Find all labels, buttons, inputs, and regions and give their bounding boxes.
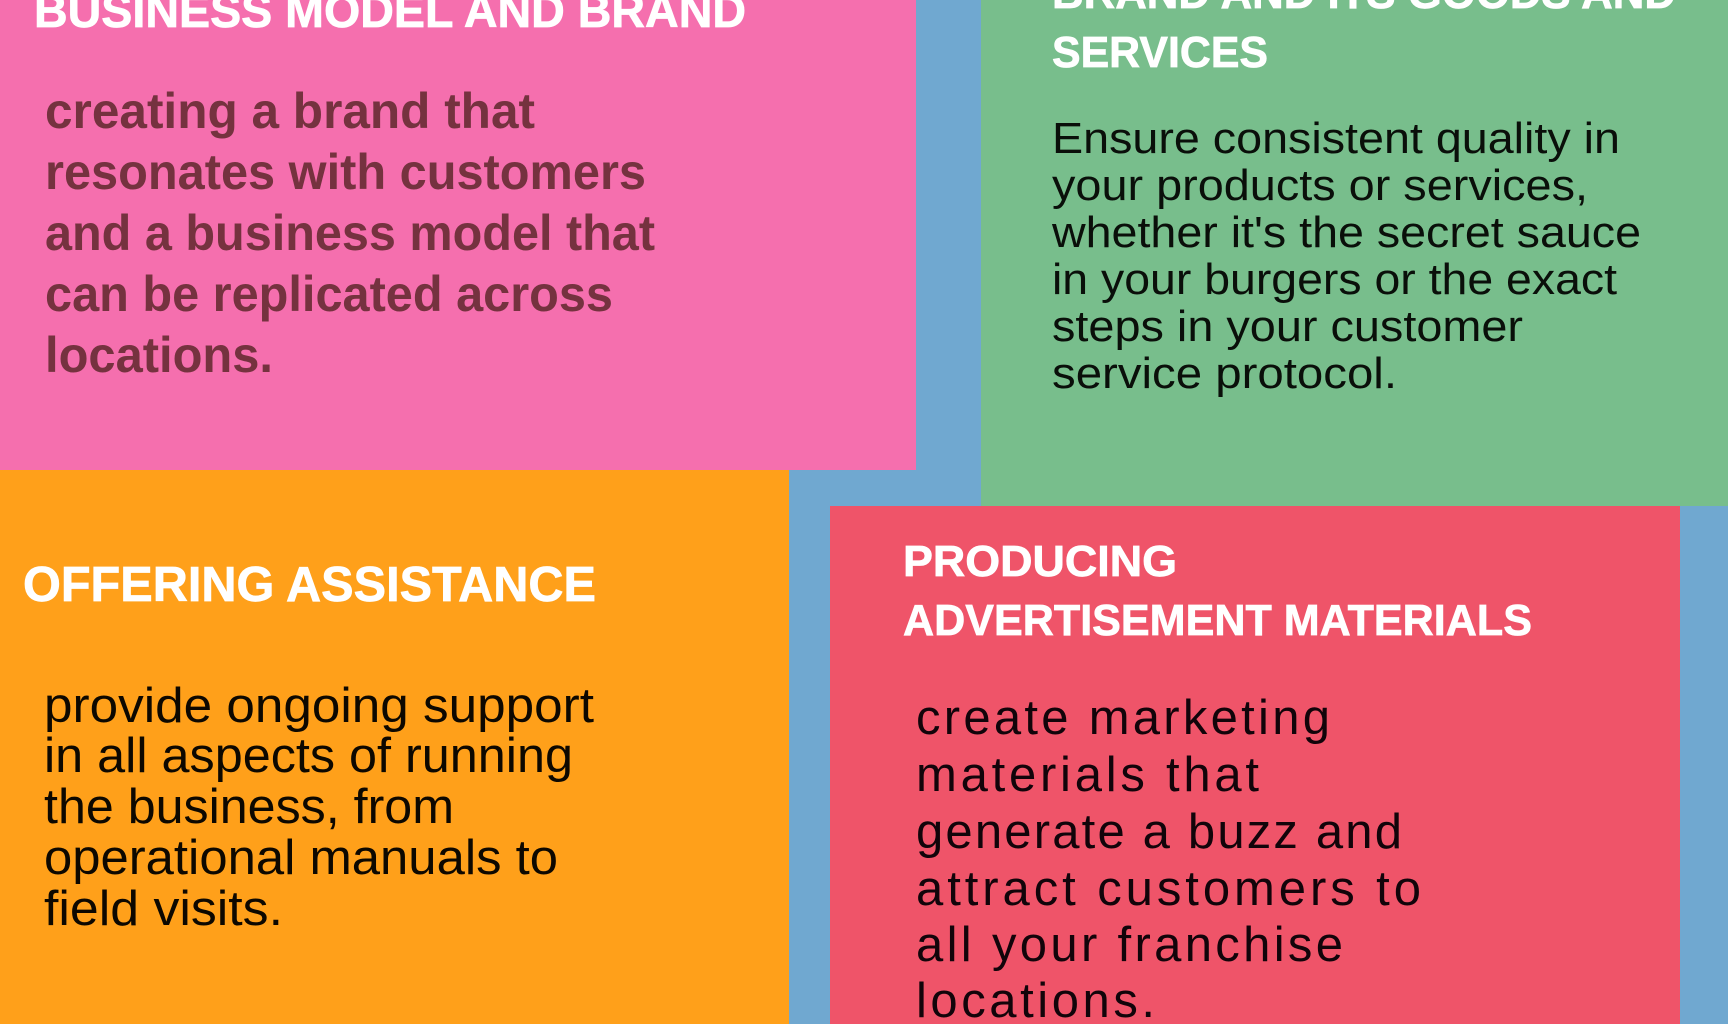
text block: consistent quality xyxy=(1051,114,1641,398)
text block: marketing materials: generate a buzz and xyxy=(916,805,1402,859)
panel: offering assistance xyxy=(0,470,789,1024)
heading: brand and its goods and services: SERVICES xyxy=(1052,28,1268,77)
text block: ongoing support: field visits. xyxy=(44,882,283,936)
text block: creating a brand: locations. xyxy=(45,327,273,383)
text block: consistent quality: steps in your customer xyxy=(1052,302,1523,351)
text block: marketing materials: materials that xyxy=(916,748,1259,802)
text block: consistent quality: service protocol. xyxy=(1052,349,1397,398)
panel: brand and its goods and services xyxy=(981,0,1728,506)
text block: ongoing support: the business, from xyxy=(44,780,454,834)
text block: marketing materials xyxy=(916,691,1421,1024)
text block: consistent quality: your products or services, xyxy=(1052,161,1588,210)
heading: brand and its goods and services xyxy=(1052,0,1676,77)
text block: creating a brand xyxy=(45,83,655,383)
text block: marketing materials: create marketing xyxy=(916,691,1330,745)
panel: business model and brand xyxy=(0,0,916,470)
text block: consistent quality: in your burgers or the exact xyxy=(1052,255,1617,304)
text block: ongoing support: provide ongoing support xyxy=(44,679,594,733)
panel: producing advertisement materials xyxy=(830,506,1680,1024)
heading: producing advertisement materials xyxy=(903,537,1532,645)
text block: marketing materials: attract customers to xyxy=(916,862,1421,916)
heading: producing advertisement materials: ADVERTISEMENT MATERIALS xyxy=(903,596,1532,645)
text block: consistent quality: whether it's the secret sauce xyxy=(1051,208,1641,257)
text block: creating a brand: creating a brand that xyxy=(45,83,535,139)
text block: marketing materials: all your franchise xyxy=(916,918,1343,972)
text block: creating a brand: resonates with customers xyxy=(45,144,646,200)
heading: offering assistance: OFFERING ASSISTANCE xyxy=(23,558,596,612)
text block: ongoing support xyxy=(44,679,594,936)
text block: creating a brand: and a business model that xyxy=(45,205,655,261)
text block: ongoing support: operational manuals to xyxy=(44,831,558,885)
text block: consistent quality: Ensure consistent quality in xyxy=(1052,114,1620,163)
heading: producing advertisement materials: PRODUCING xyxy=(903,537,1177,586)
text block: ongoing support: in all aspects of running xyxy=(44,729,573,783)
text block: creating a brand: can be replicated across xyxy=(45,266,613,322)
